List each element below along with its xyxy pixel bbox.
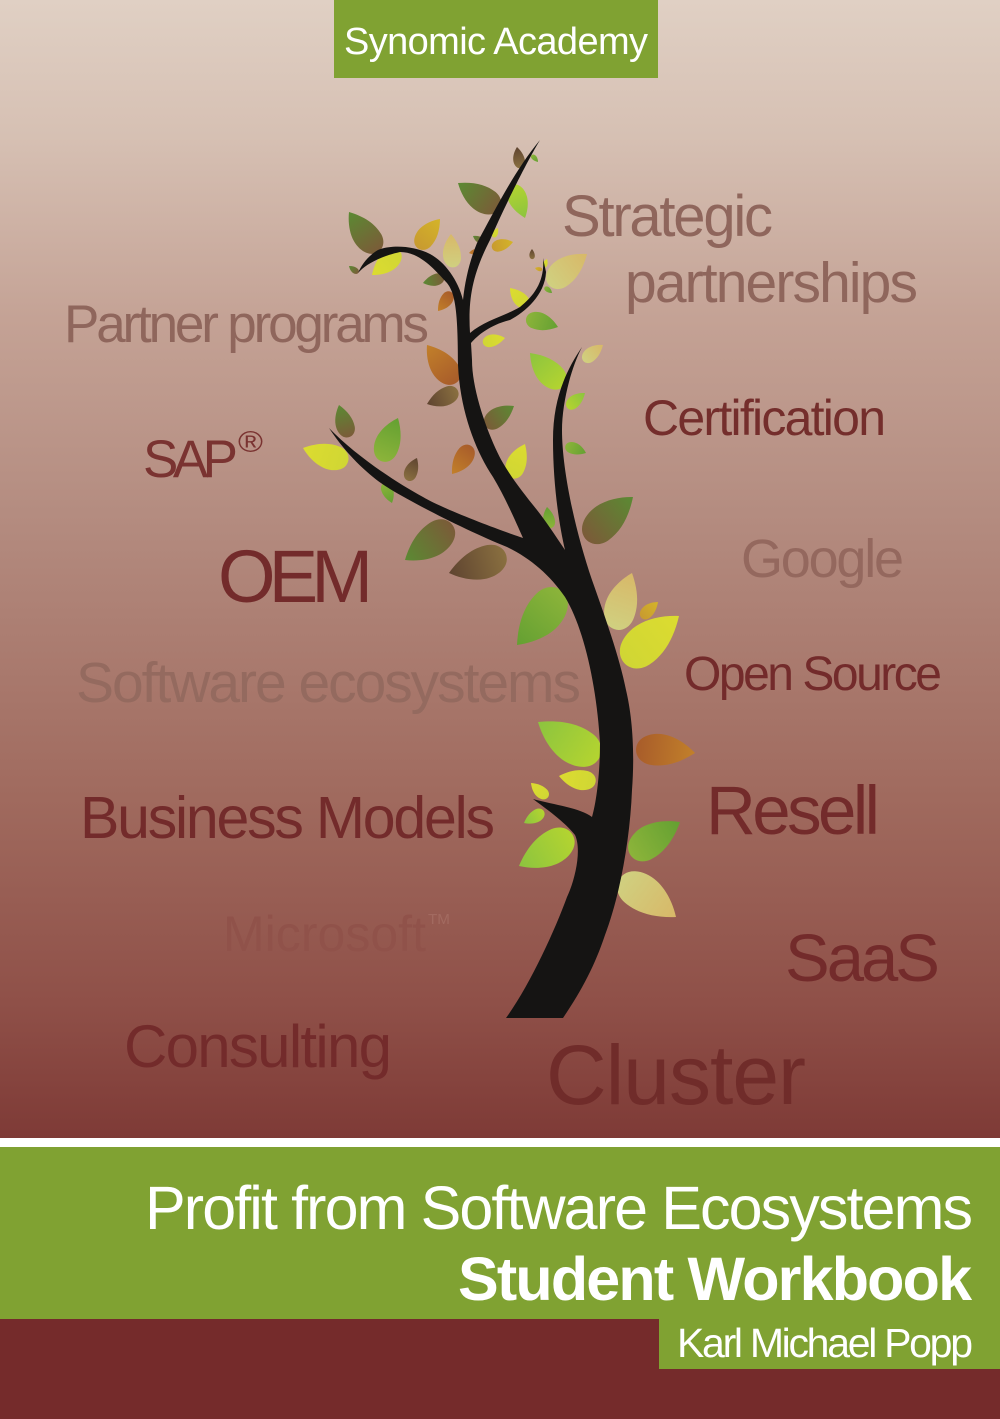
word cloud of keywords: TM [428,911,450,928]
title: Profit from Software Ecosystems [145,1174,973,1242]
word cloud of keywords: Consulting [124,1013,392,1080]
word cloud of keywords: Strategic [562,184,773,249]
word cloud of keywords: Resell [706,772,880,849]
word cloud of keywords: OEM [218,535,373,618]
word cloud of keywords: partnerships [625,251,918,315]
tree trunk and branches [329,140,633,1018]
word cloud of keywords: SaaS [785,921,940,996]
white divider strip [0,1138,1000,1148]
author box: Karl Michael Popp [677,1320,973,1366]
word cloud of keywords: Certification [643,390,886,446]
word cloud of keywords: Microsoft [223,906,426,962]
word cloud of keywords: Cluster [546,1028,806,1122]
word cloud of keywords: ® [238,426,263,459]
word cloud of keywords: Open Source [684,648,942,701]
word cloud of keywords: Partner programs [64,295,429,354]
word cloud of keywords: SAP [143,430,238,489]
illustration: tree with leaves [299,140,697,1018]
word cloud of keywords: Business Models [80,785,495,851]
series label box: Synomic Academy: Synomic Academy [344,21,648,63]
word cloud of keywords [64,184,942,1122]
word cloud of keywords: Google [741,529,904,589]
leaves [299,146,697,932]
word cloud of keywords: Software ecosystems [76,651,581,715]
series label box: Synomic Academy [334,0,658,78]
subtitle: Student Workbook [458,1245,972,1313]
title panel [0,1147,1000,1319]
bottom dark red band [0,1319,1000,1419]
